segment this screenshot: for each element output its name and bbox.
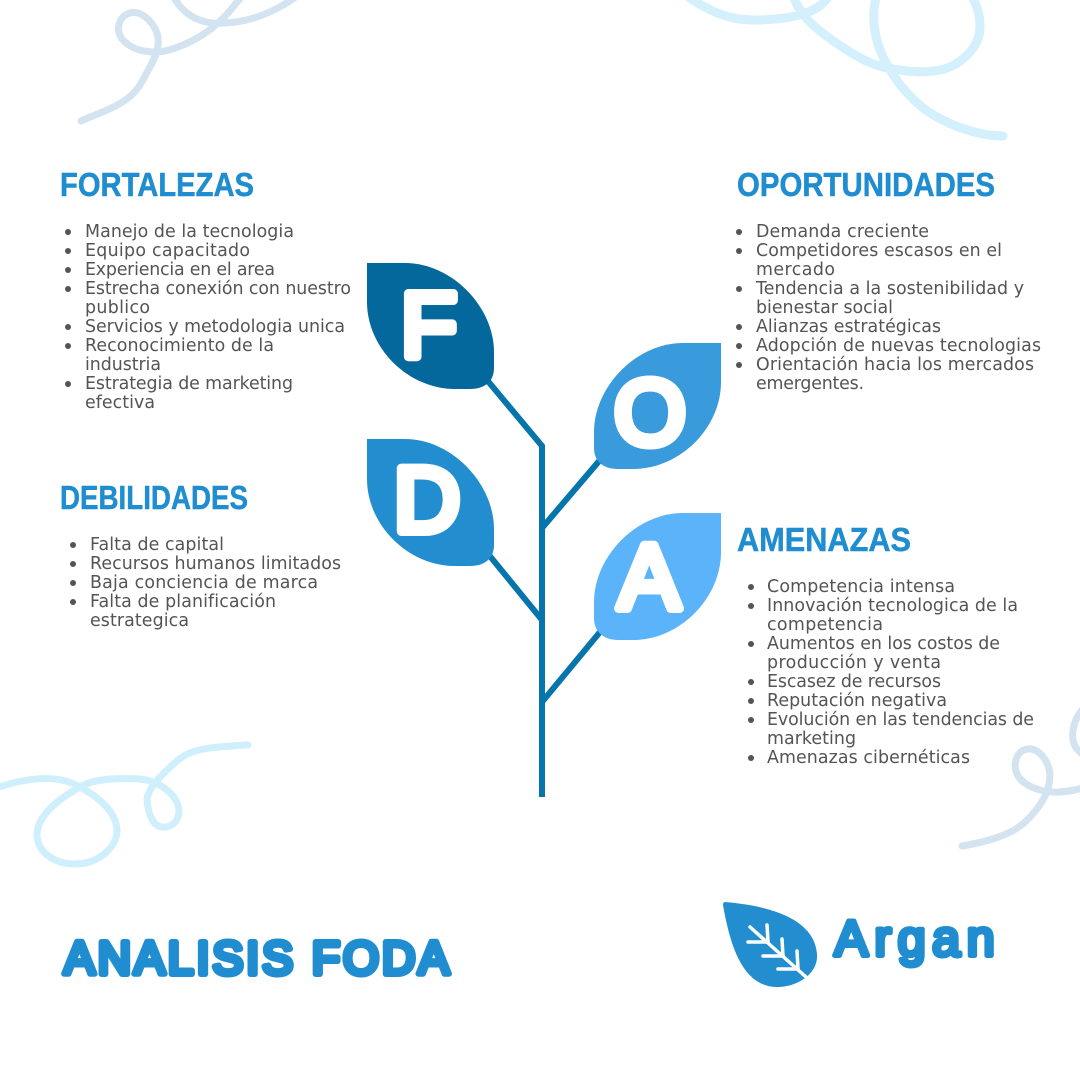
list: debilidades [70,535,341,631]
list: oportunidades: Orientación hacia los mercados [756,355,1034,375]
panel: amenazas [737,521,1034,768]
list: oportunidades: Tendencia a la sostenibilidad y [755,279,1024,299]
list: fortalezas [65,222,351,413]
list: amenazas: competencia [767,615,883,635]
list: fortalezas: Equipo capacitado [85,241,250,261]
list: fortalezas: Experiencia en el area [85,260,275,280]
leaf F: F [401,274,457,376]
list: amenazas: Competencia intensa [767,577,955,597]
plant stem and branches [487,380,600,797]
list: fortalezas: Manejo de la tecnologia [85,222,294,242]
leaf D: D [394,450,460,552]
list: debilidades: Baja conciencia de marca [90,573,318,593]
list: debilidades: Falta de capital [90,535,224,555]
list: amenazas: marketing [767,729,856,749]
leaf A [594,513,721,640]
wordmark: Argan [834,910,994,966]
list: fortalezas: Reconocimiento de la [85,336,274,356]
panel: debilidades [60,479,341,631]
list: oportunidades: Adopción de nuevas tecnologias [756,336,1041,356]
list: fortalezas: publico [85,298,150,318]
list: amenazas: Evolución en las tendencias de [767,710,1034,730]
heading: debilidades: DEBILIDADES [60,479,248,516]
list: oportunidades: bienestar social [756,298,893,318]
list: fortalezas: efectiva [85,393,155,413]
list: amenazas: Escasez de recursos [767,672,941,692]
list: fortalezas: Estrategia de marketing [85,374,293,394]
list: amenazas: Aumentos en los costos de [767,634,1000,654]
list: fortalezas: industria [85,355,161,375]
list: fortalezas: Estrecha conexión con nuestro [85,279,351,299]
list: debilidades: estrategica [90,611,189,631]
list: debilidades: Falta de planificación [90,592,276,612]
logo: Argan [723,902,994,987]
list: amenazas: producción y venta [767,653,941,673]
icon: logo leaf [723,902,817,987]
leaf O [594,343,721,469]
list: oportunidades: Alianzas estratégicas [756,317,941,337]
decorative squiggle: bottom right [962,708,1080,846]
leaf O: O [614,362,686,464]
decorative squiggle: top left [81,0,297,121]
list: oportunidades: Competidores escasos en el [756,241,1002,261]
decorative squiggle: bottom left [0,745,248,864]
list: oportunidades: emergentes. [756,374,864,394]
list: oportunidades: mercado [756,260,835,280]
list: fortalezas: Servicios y metodologia unica [85,317,345,337]
heading: fortalezas: FORTALEZAS [60,166,254,203]
decorative squiggle: top right [687,0,1003,136]
list: amenazas: Amenazas cibernéticas [767,748,970,768]
title: ANALISIS FODA [64,932,449,984]
list: amenazas [748,577,1034,768]
list: debilidades: Recursos humanos limitados [90,554,341,574]
list: oportunidades: Demanda creciente [756,222,929,242]
list: amenazas: Innovación tecnologica de la [767,596,1018,616]
heading: oportunidades: OPORTUNIDADES [737,166,995,203]
leaf A: A [618,526,680,628]
panel: oportunidades [736,166,1041,394]
leaf D [367,439,494,566]
heading: amenazas: AMENAZAS [737,521,911,558]
list: oportunidades [736,222,1041,394]
list: amenazas: Reputación negativa [767,691,947,711]
panel: fortalezas [60,166,351,413]
leaf F [367,263,494,389]
